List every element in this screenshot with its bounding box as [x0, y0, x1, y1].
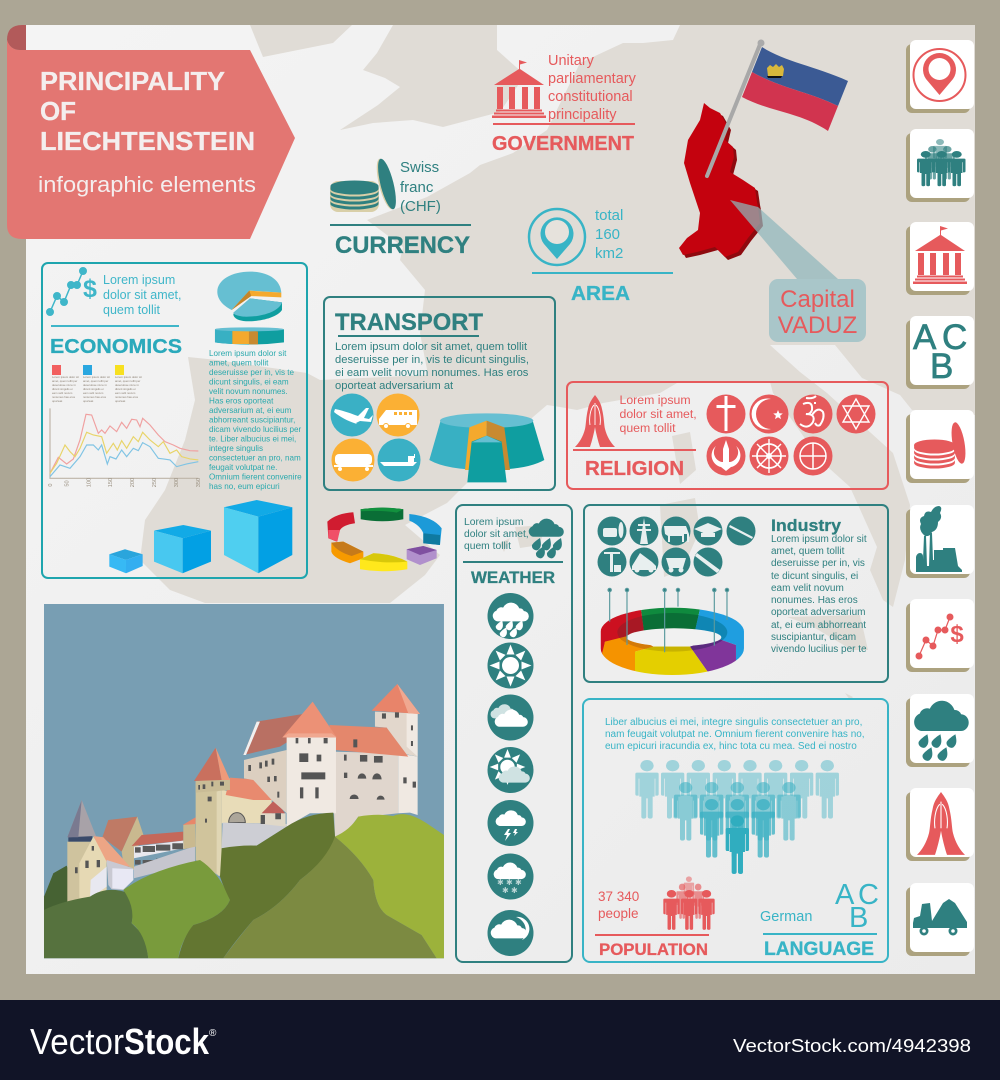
castle illustration	[44, 604, 444, 958]
area block: total	[595, 207, 623, 224]
government block: parliamentary	[548, 71, 637, 87]
icon card: language: B	[930, 347, 953, 386]
government block: Unitary	[548, 53, 595, 69]
chart legend: deseruisse vis te in	[115, 383, 139, 387]
chart legend: dicunt singulis ei	[83, 387, 104, 391]
icon card: industry	[906, 505, 974, 578]
industry paragraph: suscipiantur, dicam	[771, 632, 856, 643]
icon: snow	[488, 854, 534, 900]
economics paragraph: Omnium fierent convenire	[209, 472, 302, 482]
icon card: economics: $	[950, 621, 964, 648]
icon: ABC letters	[835, 879, 879, 934]
icon: cross	[706, 394, 746, 434]
chart legend: deseruisse vis te in	[83, 383, 107, 387]
line chart: 50	[65, 480, 71, 487]
icon: snow: ✱	[497, 878, 504, 887]
panel: weather: Lorem ipsum	[464, 517, 524, 528]
logo: Stock	[124, 1021, 210, 1062]
chart legend: eam velit novum	[52, 391, 73, 395]
heading: industry: Industry	[771, 516, 842, 535]
icon card: location	[906, 40, 974, 113]
icon card: religion	[906, 788, 974, 861]
panel: weather	[456, 505, 572, 962]
segmented ring chart	[593, 588, 750, 675]
population paragraph: Liber albucius ei mei, integre singulis consectetuer an pro,	[605, 717, 862, 728]
economics paragraph: deseruisse per in, vis te	[209, 368, 295, 377]
3D pie chart	[429, 413, 544, 482]
3D segmented ring	[327, 508, 442, 571]
footer bar	[0, 1000, 1000, 1080]
industry paragraph: vivendo lucilius per te	[771, 644, 867, 655]
area block: km2	[595, 245, 623, 262]
icon: sun cross	[794, 436, 832, 476]
economics paragraph: dicunt singulis, ei eam	[209, 378, 289, 386]
icon: snow: ✱	[515, 878, 522, 887]
icon card: language	[906, 316, 974, 389]
icon card: mining truck	[906, 883, 974, 956]
industry paragraph: te dicunt singulis, ei	[771, 571, 858, 582]
economics paragraph: has no, eum epicuri	[209, 482, 280, 491]
chart legend: nonumes has eros	[83, 395, 107, 399]
icon: growth chart with dollar	[46, 268, 97, 316]
icon: people group	[663, 876, 715, 930]
icon card: currency	[906, 410, 974, 483]
icon card: language: C	[942, 318, 967, 357]
industry paragraph: oporteat adversarium	[771, 607, 866, 618]
line chart: 150	[108, 478, 114, 487]
people pyramid	[635, 760, 839, 874]
line chart: 250	[152, 478, 158, 487]
industry paragraph: amet, quem tollit	[771, 546, 845, 557]
government block: GOVERNMENT	[492, 133, 634, 155]
panel: religion: dolor sit amet,	[620, 407, 697, 421]
industry paragraph: Lorem ipsum dolor sit	[771, 534, 867, 545]
population paragraph: nam feugait volutpat ne. Omnium fierent convenire has no,	[605, 729, 865, 740]
panel: transport: oporteat adversarium at	[335, 380, 454, 392]
title banner: PRINCIPALITY	[40, 66, 225, 96]
economics paragraph: abhorreant suscipiantur,	[209, 416, 295, 424]
chart legend: deseruisse vis te in	[52, 383, 76, 387]
industry icons	[598, 516, 756, 576]
currency block: franc	[400, 179, 434, 196]
population paragraph: eum epicuri iracundia ex, hinc tota cu mea. Sed ei nostro	[605, 741, 857, 752]
icon: clouds	[488, 694, 534, 740]
icon: khanda	[706, 436, 746, 476]
chart legend	[52, 365, 142, 403]
currency block: CURRENCY	[335, 232, 470, 259]
chart legend: dicunt singulis ei	[52, 387, 73, 391]
icon: ABC letters: C	[858, 879, 879, 911]
economics paragraph	[209, 349, 302, 491]
panel: religion	[567, 382, 888, 489]
population paragraph	[605, 717, 865, 752]
icon: sun and cloud	[488, 747, 534, 793]
industry paragraph: deseruisse per in, vis	[771, 558, 865, 569]
economics paragraph: dicam vivendo lucilius per	[209, 425, 302, 434]
panel: economics: quem tollit	[103, 303, 160, 317]
chart legend: Lorem ipsum dolor sit	[83, 375, 110, 379]
chart legend: nonumes has eros	[52, 395, 76, 399]
panel: population and language: LANGUAGE	[764, 939, 874, 960]
panel: weather: dolor sit amet,	[464, 529, 529, 540]
icon: ABC letters: B	[849, 902, 868, 934]
map of Liechtenstein	[682, 106, 763, 260]
title banner: infographic elements	[38, 172, 256, 197]
economics paragraph: amet, quem tollit	[209, 358, 269, 368]
icon: ship	[378, 438, 420, 482]
economics paragraph: velit novum nonumes.	[209, 387, 288, 396]
line chart: 0	[48, 483, 54, 487]
economics paragraph: te. Liber albucius ei mei,	[209, 434, 296, 444]
callout: capital: Capital	[780, 286, 855, 313]
area block: 160	[595, 226, 620, 243]
line chart: 350	[196, 478, 202, 487]
icon: snow: ✱	[511, 886, 518, 895]
panel: religion: RELIGION	[585, 458, 684, 480]
panel: transport: ei eam velit novum nonumes. Has eros	[335, 367, 529, 379]
economics paragraph: integre singulis	[209, 444, 263, 453]
industry paragraph: eam velit novum	[771, 583, 844, 594]
economics paragraph: adversarium at, ei eum	[209, 406, 292, 415]
panel: industry	[584, 505, 888, 682]
icon: crescent and star	[750, 394, 788, 434]
currency block	[330, 157, 471, 259]
government block	[492, 53, 637, 155]
panel: transport: TRANSPORT	[335, 309, 483, 336]
panel: transport: Lorem ipsum dolor sit amet, quem tollit	[335, 341, 528, 353]
3D cube bars	[109, 500, 292, 573]
icon: growth chart with dollar: $	[83, 275, 97, 303]
economics paragraph: Has eros oporteat	[209, 396, 274, 406]
icon: coins	[330, 157, 400, 212]
logo: ®	[209, 1028, 217, 1039]
pie chart icon	[217, 272, 282, 321]
economics paragraph: consectetuer an pro, nam	[209, 454, 301, 462]
line chart	[48, 408, 202, 487]
title banner: OF	[40, 96, 76, 126]
industry paragraph: nonumes. Has eros	[771, 595, 858, 606]
panel: weather: quem tollit	[464, 541, 511, 552]
icon: airplane	[330, 394, 374, 436]
map fill	[679, 103, 760, 257]
area block: AREA	[571, 283, 630, 305]
chart legend: Lorem ipsum dolor sit	[115, 375, 142, 379]
panel: population and language	[583, 699, 888, 962]
main keep	[243, 684, 420, 837]
icon: thunderstorm	[488, 800, 534, 846]
icon card: economics	[906, 599, 974, 672]
industry paragraph	[771, 534, 867, 655]
icon: rain	[488, 593, 534, 639]
icon: dharma wheel	[750, 436, 788, 476]
icon: snow: ✱	[506, 878, 513, 887]
icon: night cloud	[488, 910, 534, 956]
image id: VectorStock.com/4942398	[733, 1036, 971, 1056]
icon: rail tanker	[332, 438, 374, 482]
icon: snow: ✱	[502, 886, 509, 895]
line chart: 200	[130, 478, 136, 487]
chart legend: nonumes has eros	[115, 395, 139, 399]
chart legend: eam velit novum	[83, 391, 104, 395]
icon card: people	[906, 129, 974, 202]
icon card: weather	[906, 694, 974, 767]
panel: religion: quem tollit	[620, 421, 676, 435]
callout: capital	[730, 200, 866, 342]
logo: Vector	[30, 1021, 124, 1062]
chart legend: oporteat	[52, 399, 62, 403]
economics paragraph: feugait volutpat ne.	[209, 463, 277, 472]
chart legend: dicunt singulis ei	[115, 387, 136, 391]
panel: economics: dolor sit amet,	[103, 288, 182, 302]
icon: om	[794, 394, 832, 434]
panel: religion: Lorem ipsum	[620, 393, 691, 407]
chart legend: Lorem ipsum dolor sit	[52, 375, 79, 379]
industry paragraph: at, ei eum abhorreant	[771, 620, 866, 631]
panel: transport	[324, 297, 555, 490]
icon: praying hands	[575, 395, 615, 447]
line chart: 300	[174, 478, 180, 487]
chart legend: amet, quem tollit per	[83, 379, 108, 383]
chart legend: amet, quem tollit per	[115, 379, 140, 383]
icon: star of David	[836, 394, 876, 434]
chart legend: eam velit novum	[115, 391, 136, 395]
line chart: 100	[87, 478, 93, 487]
flag with pole	[707, 40, 848, 176]
panel: weather: WEATHER	[471, 569, 555, 587]
chart legend: oporteat	[115, 399, 125, 403]
icon: sun	[488, 642, 534, 688]
area block	[529, 207, 673, 305]
chart legend: oporteat	[83, 399, 93, 403]
government block: constitutional	[548, 89, 633, 105]
middle tower	[194, 748, 287, 876]
panel: population and language: POPULATION	[599, 940, 708, 959]
economics paragraph: Lorem ipsum dolor sit	[209, 349, 287, 358]
icon: government building	[492, 60, 546, 118]
currency block: (CHF)	[400, 198, 441, 215]
icon: ABC letters: A	[835, 879, 855, 911]
icon: rain cloud	[529, 519, 564, 558]
logo	[30, 1021, 217, 1062]
callout: capital: VADUZ	[778, 312, 857, 339]
chart legend: amet, quem tollit per	[52, 379, 77, 383]
panel: economics	[42, 263, 307, 578]
currency block: Swiss	[400, 159, 439, 176]
pie chart side view	[215, 327, 284, 344]
castle windows	[75, 712, 416, 873]
government block: principality	[548, 107, 617, 123]
left tower and spire	[67, 800, 196, 903]
icon: location pin	[529, 209, 585, 265]
icon card: government	[906, 222, 974, 295]
hills	[44, 813, 444, 958]
title banner	[7, 25, 295, 239]
panel: economics: ECONOMICS	[50, 335, 182, 358]
panel: population and language: people	[598, 906, 639, 921]
panel: population and language: 37 340	[598, 889, 639, 904]
icon: bus	[376, 394, 420, 436]
icon card: language: A	[913, 318, 937, 357]
panel: transport: deseruisse per in, vis te dicunt singulis,	[335, 354, 529, 366]
panel: population and language: German	[760, 909, 812, 925]
panel: economics: Lorem ipsum	[103, 273, 175, 287]
sidebar icons	[906, 40, 974, 956]
title banner: LIECHTENSTEIN	[40, 126, 255, 156]
